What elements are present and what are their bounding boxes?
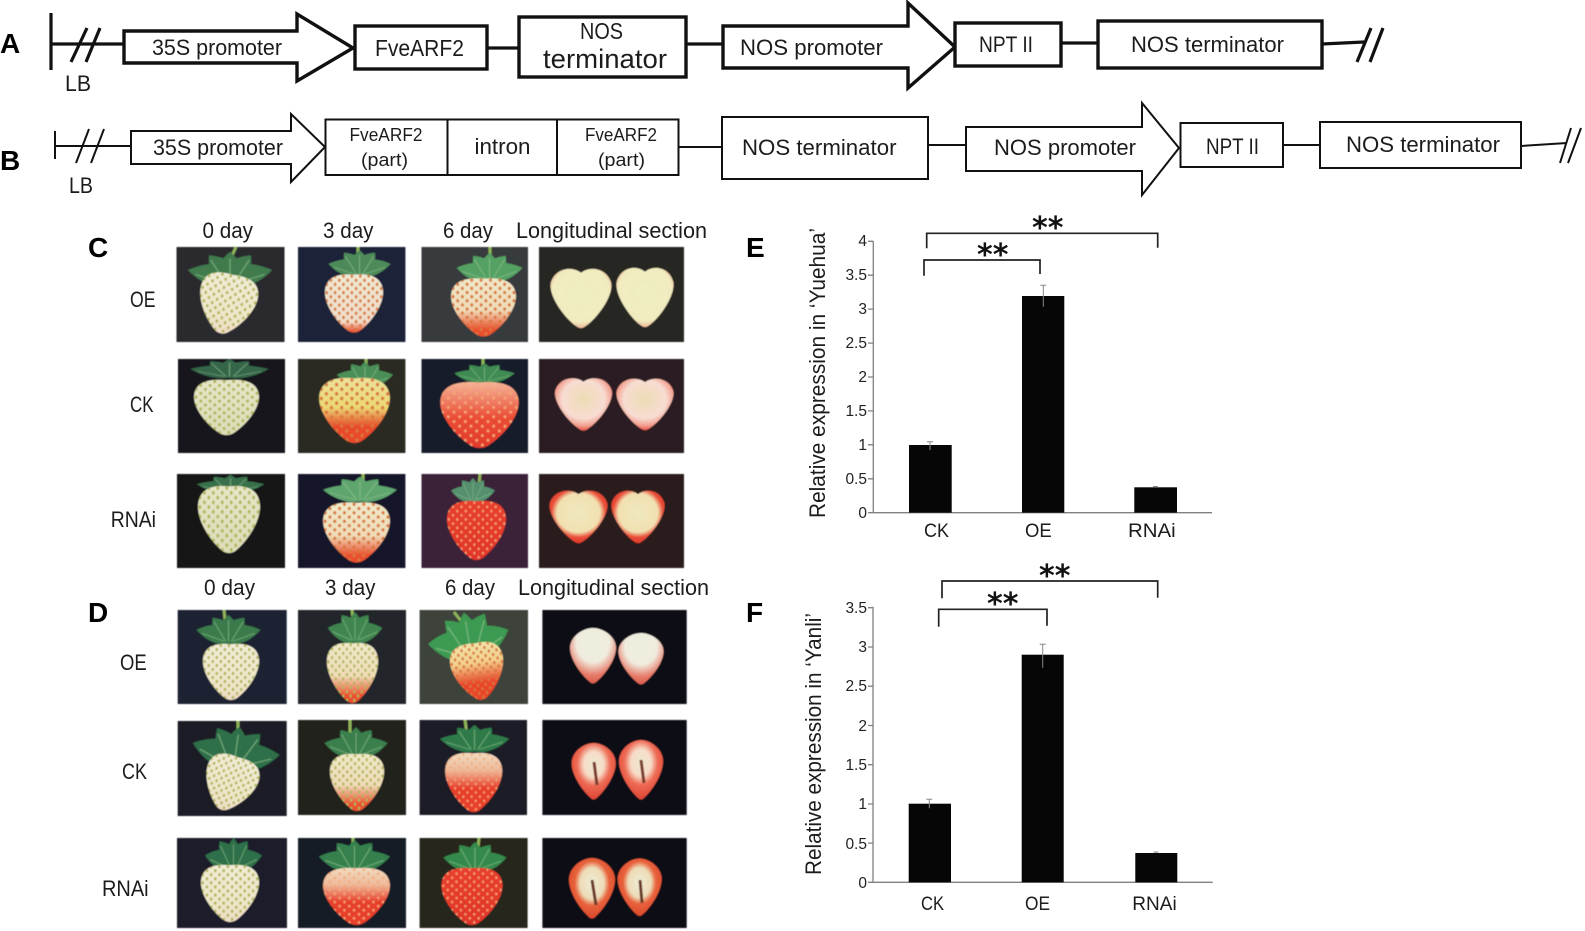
photo: OE section bbox=[539, 247, 684, 342]
row labels: OE bbox=[130, 287, 156, 312]
arrow: 35S promoter: 35S promoter bbox=[153, 135, 283, 160]
y axis tick labels: 3.5 bbox=[845, 600, 867, 617]
photo: CK 0 day bbox=[178, 717, 287, 818]
panel F: bar chart Yanli bbox=[746, 559, 1213, 915]
connector bbox=[1061, 41, 1098, 45]
y axis tick labels: 1 bbox=[858, 437, 867, 454]
arrow: 35S promoter bbox=[131, 114, 325, 182]
x axis labels bbox=[921, 894, 1177, 915]
panel letter A: A bbox=[0, 28, 20, 59]
error bars bbox=[927, 285, 1158, 488]
y axis tick labels: 0 bbox=[858, 505, 867, 522]
y axis tick labels: 1 bbox=[858, 796, 867, 813]
y axis title: Relative expression in ‘Yanli’ bbox=[801, 613, 826, 875]
photo: RNAi 6 day bbox=[422, 474, 528, 568]
bars bbox=[909, 296, 1177, 513]
column headings bbox=[204, 575, 709, 600]
y axis tick labels: 2 bbox=[858, 369, 867, 386]
row labels bbox=[102, 650, 149, 901]
significance brackets: ** bbox=[1032, 211, 1064, 246]
box: NOS terminator right: NOS terminator bbox=[1131, 32, 1284, 57]
y axis tick labels: 2.5 bbox=[845, 335, 867, 352]
axes bbox=[868, 607, 1213, 882]
photo: RNAi 0 day bbox=[177, 835, 287, 928]
y axis tick labels: 3.5 bbox=[845, 267, 867, 284]
row labels: CK bbox=[130, 392, 154, 417]
y axis tick labels bbox=[845, 233, 867, 522]
panel C: Yuehua fruit photos bbox=[88, 218, 707, 568]
right border marker bbox=[1521, 128, 1581, 163]
label LB: LB bbox=[69, 173, 93, 198]
box group: FveARF2 hairpin bbox=[326, 120, 678, 175]
box: NOS terminator bbox=[519, 17, 686, 77]
panel letter C: C bbox=[88, 232, 108, 263]
photo: CK 0 day bbox=[178, 358, 285, 453]
axes bbox=[868, 241, 1212, 513]
photo: OE 0 day bbox=[178, 610, 287, 704]
x axis labels bbox=[924, 521, 1176, 542]
box: NPT II bbox=[955, 23, 1061, 66]
panel letter B: B bbox=[0, 145, 20, 176]
photo: CK section bbox=[542, 720, 687, 815]
arrow: NOS promoter bbox=[723, 3, 955, 88]
box: NOS terminator: NOS bbox=[580, 18, 623, 44]
y axis tick labels: 2 bbox=[858, 718, 867, 735]
column headings: 3 day bbox=[325, 575, 376, 600]
photo: RNAi 0 day bbox=[177, 473, 285, 568]
box: NOS terminator right bbox=[1098, 21, 1322, 68]
photo: RNAi section bbox=[542, 838, 687, 928]
box: NOS terminator right: NOS terminator bbox=[1346, 132, 1500, 157]
x axis labels: OE bbox=[1025, 894, 1050, 915]
row labels: CK bbox=[122, 759, 147, 784]
box: NPT II: NPT II bbox=[979, 32, 1033, 57]
photo: CK 6 day bbox=[422, 359, 528, 453]
connector bbox=[928, 144, 966, 146]
connector bbox=[678, 146, 722, 148]
box: NOS terminator right bbox=[1320, 122, 1521, 168]
left border marker LB bbox=[51, 13, 124, 70]
box group: FveARF2 hairpin: (part) bbox=[598, 150, 645, 170]
row labels: OE bbox=[120, 650, 147, 675]
box: NOS terminator bbox=[722, 117, 928, 179]
y axis tick labels: 2.5 bbox=[845, 678, 867, 695]
x axis labels: CK bbox=[924, 521, 949, 542]
panel A: gene construct bbox=[0, 3, 1383, 96]
column headings: 0 day bbox=[204, 575, 255, 600]
photo: CK section bbox=[539, 359, 684, 453]
photo: OE 6 day bbox=[420, 601, 528, 704]
photo: RNAi 6 day bbox=[420, 838, 528, 928]
y axis tick labels bbox=[845, 600, 867, 892]
y axis tick labels: 0.5 bbox=[845, 471, 867, 488]
arrow: NOS promoter bbox=[966, 103, 1179, 195]
bars bbox=[909, 655, 1177, 882]
column headings: 6 day bbox=[443, 218, 493, 243]
panel letter D: D bbox=[88, 597, 108, 628]
photo: OE 6 day bbox=[422, 247, 528, 342]
panel D: Yanli fruit photos bbox=[88, 575, 709, 928]
box: FveARF2 bbox=[355, 26, 487, 69]
panel letter F: F bbox=[746, 597, 763, 628]
y axis tick labels: 3 bbox=[858, 301, 867, 318]
right border marker bbox=[1322, 28, 1383, 62]
box group: FveARF2 hairpin: FveARF2 bbox=[350, 125, 422, 145]
box group: FveARF2 hairpin: intron bbox=[474, 134, 530, 159]
significance brackets: ** bbox=[987, 587, 1019, 622]
panel letter E: E bbox=[746, 232, 765, 263]
box group: FveARF2 hairpin: FveARF2 bbox=[585, 125, 657, 145]
significance brackets bbox=[939, 559, 1158, 627]
photo: CK 3 day bbox=[298, 359, 405, 453]
photo: CK 6 day bbox=[420, 720, 527, 815]
photo: RNAi section bbox=[539, 474, 684, 568]
arrow: 35S promoter: 35S promoter bbox=[152, 35, 282, 60]
column headings: Longitudinal section bbox=[516, 218, 707, 243]
photo: RNAi 3 day bbox=[298, 837, 406, 928]
x axis labels: RNAi bbox=[1128, 521, 1176, 542]
connector bbox=[686, 42, 723, 46]
arrow: NOS promoter: NOS promoter bbox=[740, 35, 883, 60]
y axis tick labels: 0.5 bbox=[845, 836, 867, 853]
panel E: bar chart Yuehua bbox=[746, 211, 1212, 542]
y axis tick labels: 4 bbox=[858, 233, 867, 250]
error bars bbox=[926, 644, 1158, 853]
photo: OE 3 day bbox=[298, 609, 406, 704]
box: NPT II bbox=[1180, 123, 1283, 167]
photo: RNAi 3 day bbox=[298, 474, 405, 568]
significance brackets bbox=[924, 211, 1158, 276]
photo: OE section bbox=[542, 610, 687, 704]
row labels bbox=[111, 287, 156, 532]
significance brackets: ** bbox=[977, 238, 1009, 273]
y axis title: Relative expression in ‘Yuehua’ bbox=[805, 228, 830, 518]
column headings: 0 day bbox=[202, 218, 253, 243]
photo: CK 3 day bbox=[298, 720, 406, 815]
photo: OE 3 day bbox=[298, 247, 405, 342]
label LB: LB bbox=[65, 71, 91, 96]
column headings: 6 day bbox=[445, 575, 495, 600]
x axis labels: CK bbox=[921, 894, 944, 915]
column headings: Longitudinal section bbox=[518, 575, 709, 600]
column headings: 3 day bbox=[323, 218, 374, 243]
panel B: RNAi construct bbox=[0, 103, 1581, 198]
left border marker LB bbox=[55, 129, 131, 163]
connector bbox=[487, 46, 520, 50]
x axis labels: OE bbox=[1025, 521, 1052, 542]
x axis labels: RNAi bbox=[1132, 894, 1177, 915]
y axis tick labels: 3 bbox=[858, 639, 867, 656]
photo: OE 0 day bbox=[176, 247, 284, 342]
box group: FveARF2 hairpin: (part) bbox=[361, 150, 408, 170]
row labels: RNAi bbox=[102, 876, 149, 901]
y axis tick labels: 1.5 bbox=[845, 403, 867, 420]
row labels: RNAi bbox=[111, 507, 156, 532]
connector bbox=[1283, 144, 1320, 146]
y axis tick labels: 1.5 bbox=[845, 757, 867, 774]
significance brackets: ** bbox=[1039, 559, 1071, 594]
arrow: 35S promoter bbox=[124, 14, 353, 81]
box: FveARF2: FveARF2 bbox=[375, 35, 464, 61]
arrow: NOS promoter: NOS promoter bbox=[994, 135, 1136, 160]
y axis tick labels: 0 bbox=[858, 875, 867, 892]
column headings bbox=[202, 218, 707, 243]
box: NPT II: NPT II bbox=[1206, 134, 1259, 159]
box: NOS terminator: terminator bbox=[543, 44, 667, 74]
box: NOS terminator: NOS terminator bbox=[742, 135, 896, 160]
